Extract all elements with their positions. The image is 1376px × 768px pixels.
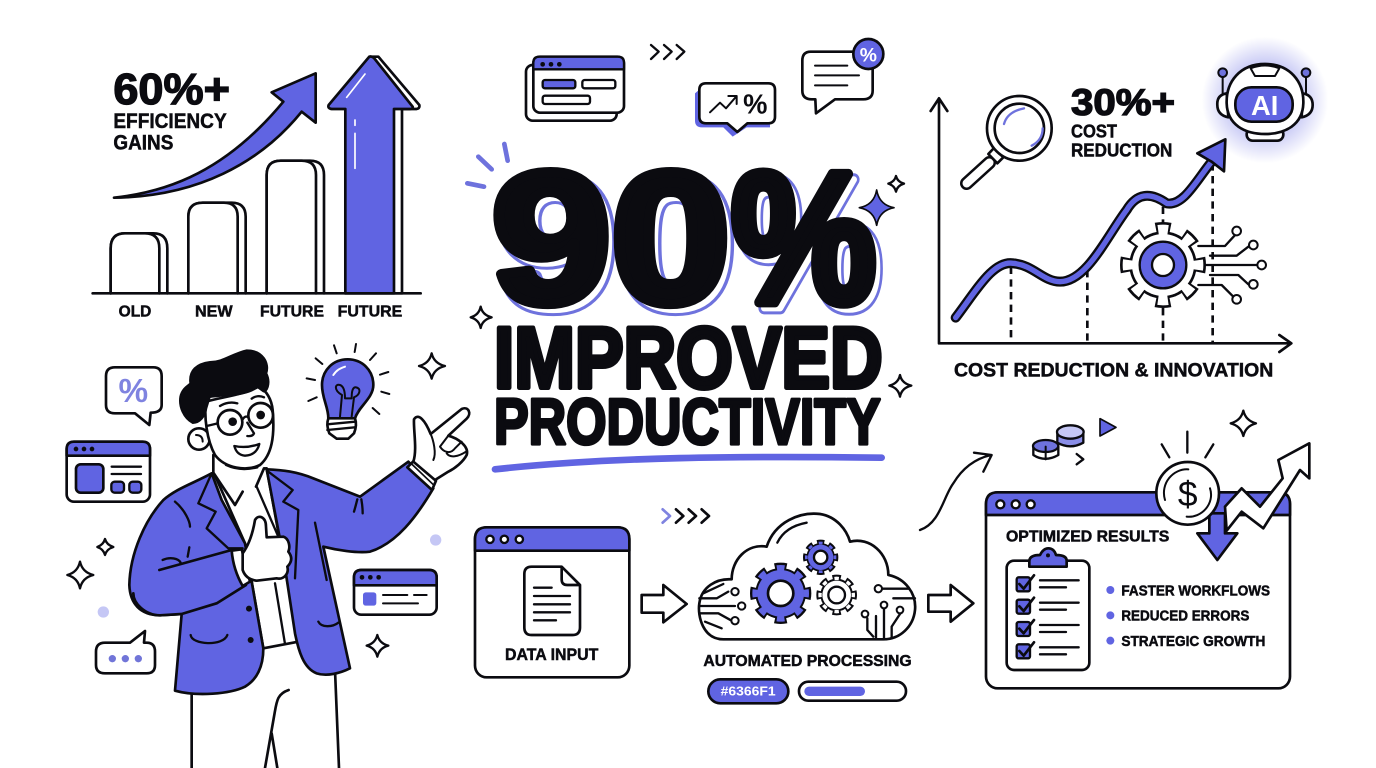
icon: sparkle lower: [367, 635, 388, 657]
icon: small window: [354, 570, 437, 615]
results list: FASTER WORKFLOWS: [1121, 583, 1270, 599]
icon: chevrons: [651, 45, 684, 59]
jacket: [129, 473, 263, 694]
icon: clipboard checklist: [1007, 548, 1089, 670]
headline: 90%: [492, 133, 882, 348]
large gear: [755, 568, 806, 619]
figure: presenter: [129, 350, 469, 768]
icon: stacked window: [526, 57, 624, 121]
shirt: [213, 468, 298, 648]
bar labels: FUTURE: [338, 304, 403, 321]
arrow into results: [928, 585, 973, 622]
bar labels: FUTURE: [260, 304, 324, 321]
progress bar: [799, 682, 906, 701]
icon: percent bubble: [106, 367, 162, 425]
panel: data input and automated processing: [475, 509, 915, 703]
circuits right: [867, 589, 915, 638]
trousers: [192, 670, 339, 768]
big upward arrow: [328, 56, 419, 293]
underline: [495, 457, 882, 469]
panel: presenter with icons: [67, 344, 469, 768]
offset outline of digits: %: [736, 139, 882, 348]
icon: light bulb: [307, 344, 389, 439]
icon: sparkle: [1231, 411, 1256, 436]
icon: coins: [1033, 425, 1084, 459]
icon: gear with circuits: [1128, 227, 1266, 304]
headline: 90%: %: [731, 133, 876, 342]
bar labels: OLD: [119, 304, 151, 321]
glasses and face detail: [218, 410, 242, 435]
curved arrow: [920, 453, 992, 530]
white gear: [820, 578, 853, 612]
stat: 30%+ cost reduction: REDUCTION: [1071, 140, 1172, 161]
bar labels: NEW: [195, 304, 234, 321]
results list: STRATEGIC GROWTH: [1121, 634, 1265, 650]
panel: cost reduction chart: [931, 37, 1328, 382]
offset outline of digits: 90: [497, 139, 736, 348]
hand thumbs up: [243, 517, 291, 581]
icon: speech bubble with percent badge: %: [860, 45, 877, 66]
headline: productivity: PRODUCTIVITY: [494, 385, 881, 458]
icon: trend bubble: [695, 83, 775, 137]
panel: efficiency bar chart: [93, 56, 421, 321]
decorative spark rays: [467, 144, 508, 187]
ear: [188, 428, 210, 450]
panel: optimized results: [920, 411, 1309, 688]
dashed guides: [1011, 163, 1213, 343]
sparkles: [471, 176, 911, 397]
icon: typing bubble: [96, 631, 155, 673]
pill: colour code: [708, 679, 788, 703]
heading: 60%+ efficiency gains: [113, 65, 230, 154]
right cuff: [407, 461, 436, 490]
axes: [931, 98, 1291, 352]
circuits left: [699, 584, 735, 628]
card: results window: OPTIMIZED RESULTS: [1006, 529, 1170, 546]
icon: dollar coin: [1156, 432, 1219, 525]
card: data input: [475, 527, 629, 677]
jacket details: [163, 472, 363, 643]
icon: AI robot: AI: [1251, 90, 1278, 121]
pill: colour code: #6366F1: [721, 685, 776, 699]
panel: center headline: [467, 39, 911, 469]
heading: 60%+ efficiency gains: GAINS: [113, 130, 173, 154]
bar labels: [119, 304, 403, 321]
results list: REDUCED ERRORS: [1121, 609, 1250, 625]
offset outline of digits: %: [736, 139, 882, 348]
icon: magnifier: [967, 96, 1052, 183]
pointing hand: [413, 408, 469, 480]
results list: [1106, 583, 1270, 650]
icon: document: [524, 567, 580, 635]
icon: speech bubble with percent badge: [802, 39, 883, 113]
stat: 30%+ cost reduction: 30%+: [1071, 82, 1175, 123]
icon: zigzag up arrow: [1225, 443, 1309, 531]
baseline: [93, 289, 421, 297]
card: results window: [986, 492, 1290, 688]
small purple gear: [806, 543, 835, 572]
icon: percent bubble: %: [119, 373, 148, 410]
icon: trend bubble: %: [743, 88, 767, 119]
stat: 30%+ cost reduction: [1071, 82, 1175, 161]
bars: [111, 161, 324, 293]
arrow: [642, 585, 687, 622]
neck and collar: [213, 455, 264, 505]
heading: 60%+ efficiency gains: 60%+: [113, 65, 230, 114]
headline: improved: IMPROVED: [494, 311, 883, 407]
chart caption: COST REDUCTION & INNOVATION: [954, 361, 1273, 382]
face: [205, 387, 273, 468]
pale dots: [98, 534, 441, 618]
card: data input: DATA INPUT: [505, 645, 598, 664]
chevrons: [663, 509, 709, 523]
trend line: [956, 139, 1225, 318]
hair: [180, 350, 269, 423]
heading: 60%+ efficiency gains: EFFICIENCY: [113, 109, 227, 133]
icon: down arrow: [1197, 513, 1237, 560]
label: automated processing: AUTOMATED PROCESSING: [703, 653, 912, 670]
icon: dollar coin: $: [1178, 475, 1198, 514]
left sleeve: [133, 550, 246, 615]
icon: sparkles left: [67, 539, 113, 588]
stat: 30%+ cost reduction: COST: [1071, 120, 1118, 141]
icon: sparkle top: [419, 353, 445, 379]
offset outline of digits: 90: [497, 139, 736, 348]
icon: AI robot: [1217, 64, 1313, 141]
icon: triangle and chevron: [1077, 419, 1116, 464]
curved growth arrow: [114, 73, 316, 198]
icon: window card: [67, 442, 150, 502]
offset outline of digits: [497, 139, 882, 348]
icon: cloud with gears: [699, 514, 915, 639]
AI glow: [1202, 37, 1328, 163]
headline: 90%: 90: [492, 133, 730, 342]
